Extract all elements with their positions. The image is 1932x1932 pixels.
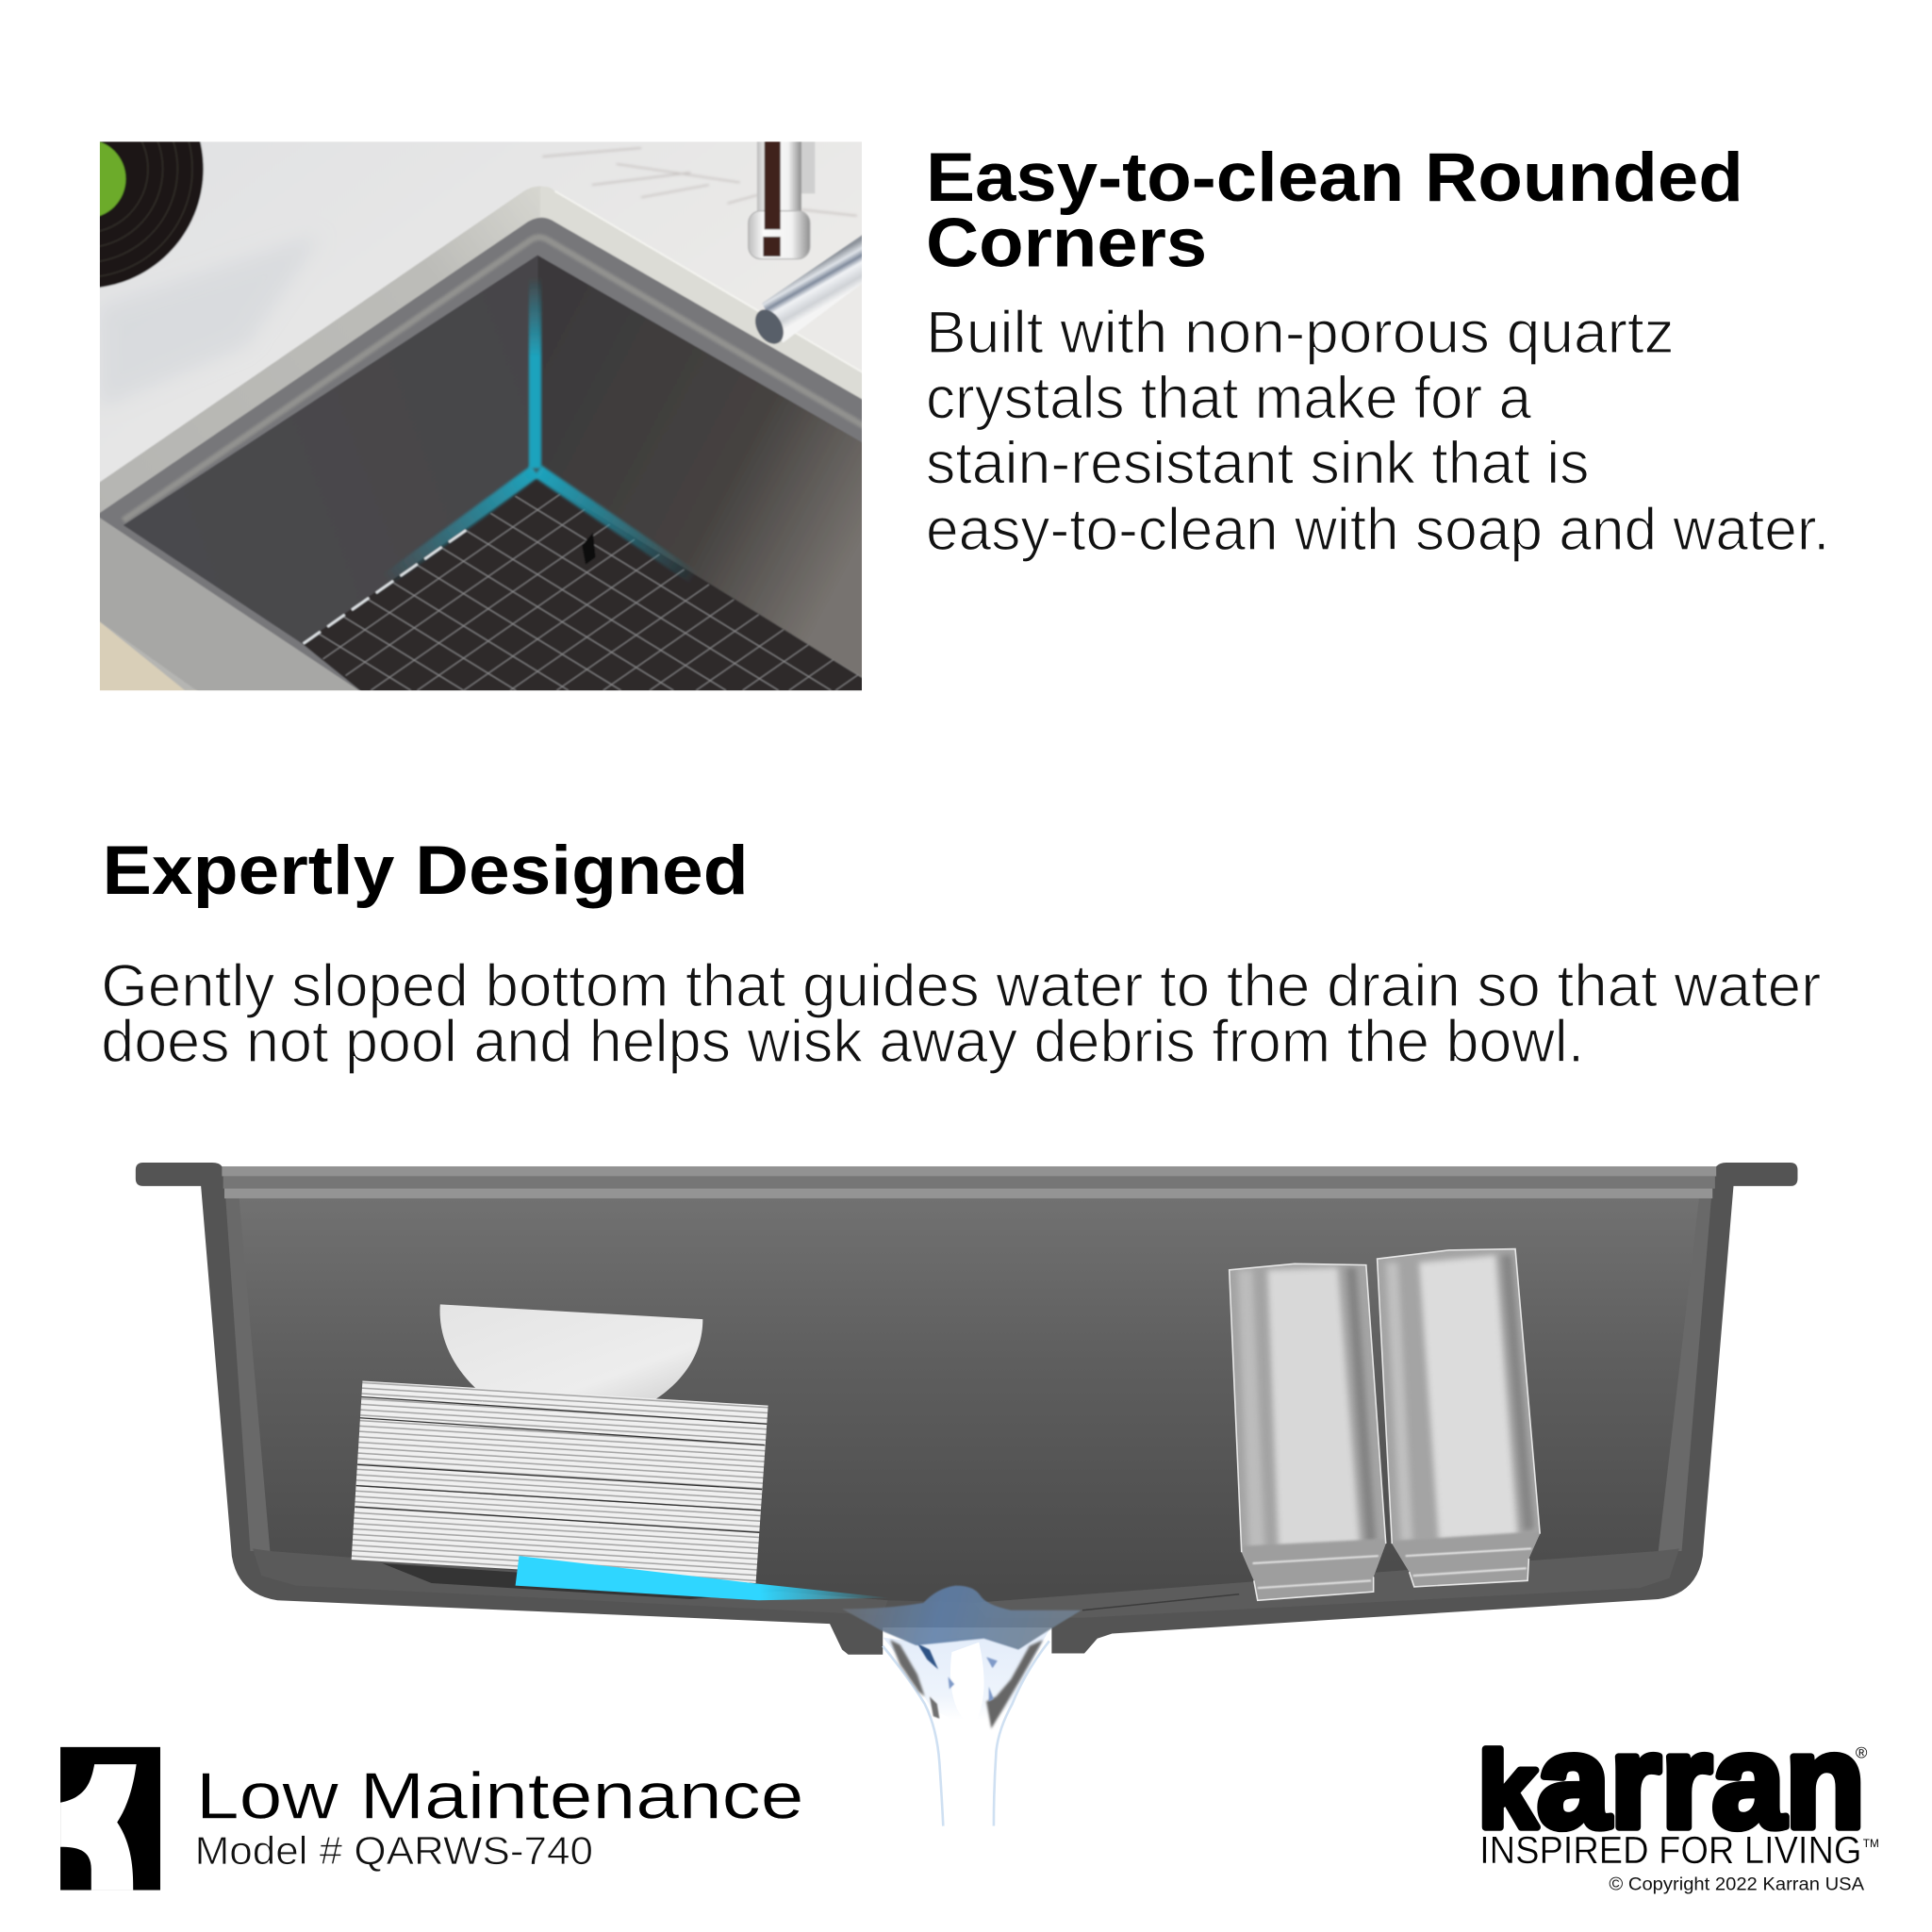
cyan water flow bar <box>516 1556 890 1600</box>
back wall <box>239 1198 1699 1603</box>
marble veining <box>542 148 857 216</box>
sink body <box>136 1163 1797 1655</box>
logo: karran wordmark: karran <box>1478 1707 1865 1856</box>
glass right <box>1378 1249 1541 1593</box>
marble countertop <box>100 141 862 482</box>
text block: expertly designed description <box>101 953 1821 1075</box>
heading: rounded corners: Easy-to-clean Rounded <box>926 139 1743 216</box>
panel: sink cross-section <box>136 1163 1797 1826</box>
icon: black plate <box>0 49 204 289</box>
floor <box>302 477 867 695</box>
sink outer rim left <box>96 186 567 690</box>
plate ridges <box>0 60 192 277</box>
heading: rounded corners: Corners <box>926 204 1207 281</box>
icon: Karran K mark <box>60 1747 160 1891</box>
glass left <box>1230 1263 1387 1603</box>
tagline: INSPIRED FOR LIVING <box>1479 1828 1861 1872</box>
translucent drain water <box>842 1586 1082 1650</box>
cyan highlighted corner: left <box>388 471 535 580</box>
wire grid dashes along wall <box>304 530 466 644</box>
right wall <box>537 256 867 681</box>
text block: rounded corners description: crystals that make for a <box>926 365 1531 431</box>
sink outer rim right <box>541 194 862 400</box>
copyright: © Copyright 2022 Karran USA <box>1609 1874 1865 1895</box>
stacked plates <box>352 1381 768 1583</box>
title: low maintenance: Low Maintenance <box>196 1759 804 1833</box>
text block: expertly designed description: does not pool and helps wisk away debris from the bowl. <box>101 1009 1584 1075</box>
logo: karran wordmark: ® <box>1856 1744 1868 1762</box>
faucet <box>749 138 815 259</box>
soft marble shading <box>106 249 298 394</box>
heading: expertly designed: Expertly Designed <box>103 832 749 909</box>
dark rim band <box>96 218 867 695</box>
top rim bands <box>222 1166 1716 1198</box>
wire grid <box>319 494 862 690</box>
counter edge highlight <box>554 191 867 375</box>
icon: lime <box>47 140 125 218</box>
tagline: TM <box>1863 1838 1879 1850</box>
cyan highlighted corner: vertical <box>529 277 541 469</box>
text block: rounded corners description <box>926 300 1829 563</box>
model number: Model # QARWS-740 <box>195 1828 593 1873</box>
floor shadow <box>382 1563 789 1599</box>
cyan highlighted corner: right <box>537 471 693 577</box>
panel: sink corner photo <box>100 141 862 690</box>
heading: rounded corners <box>926 139 1743 281</box>
text block: expertly designed description: Gently sloped bottom that guides water to the drain so that water <box>101 953 1821 1019</box>
faucet handle <box>754 234 862 345</box>
sink front rim <box>96 513 366 695</box>
beige cabinet front <box>96 617 204 695</box>
water stream <box>883 1630 1049 1826</box>
back wall edge <box>225 1198 1711 1551</box>
text block: rounded corners description: Built with non-porous quartz <box>926 300 1675 366</box>
drain clip <box>582 533 596 565</box>
sloped floor left <box>253 1548 887 1615</box>
text block: rounded corners description: stain-resistant sink that is <box>926 431 1589 497</box>
left wall <box>124 256 537 644</box>
text block: rounded corners description: easy-to-clean with soap and water. <box>926 497 1829 563</box>
sloped floor right <box>974 1548 1679 1618</box>
drain seam <box>1082 1594 1239 1610</box>
bowl <box>440 1304 702 1400</box>
rim ledge lines <box>124 238 867 520</box>
